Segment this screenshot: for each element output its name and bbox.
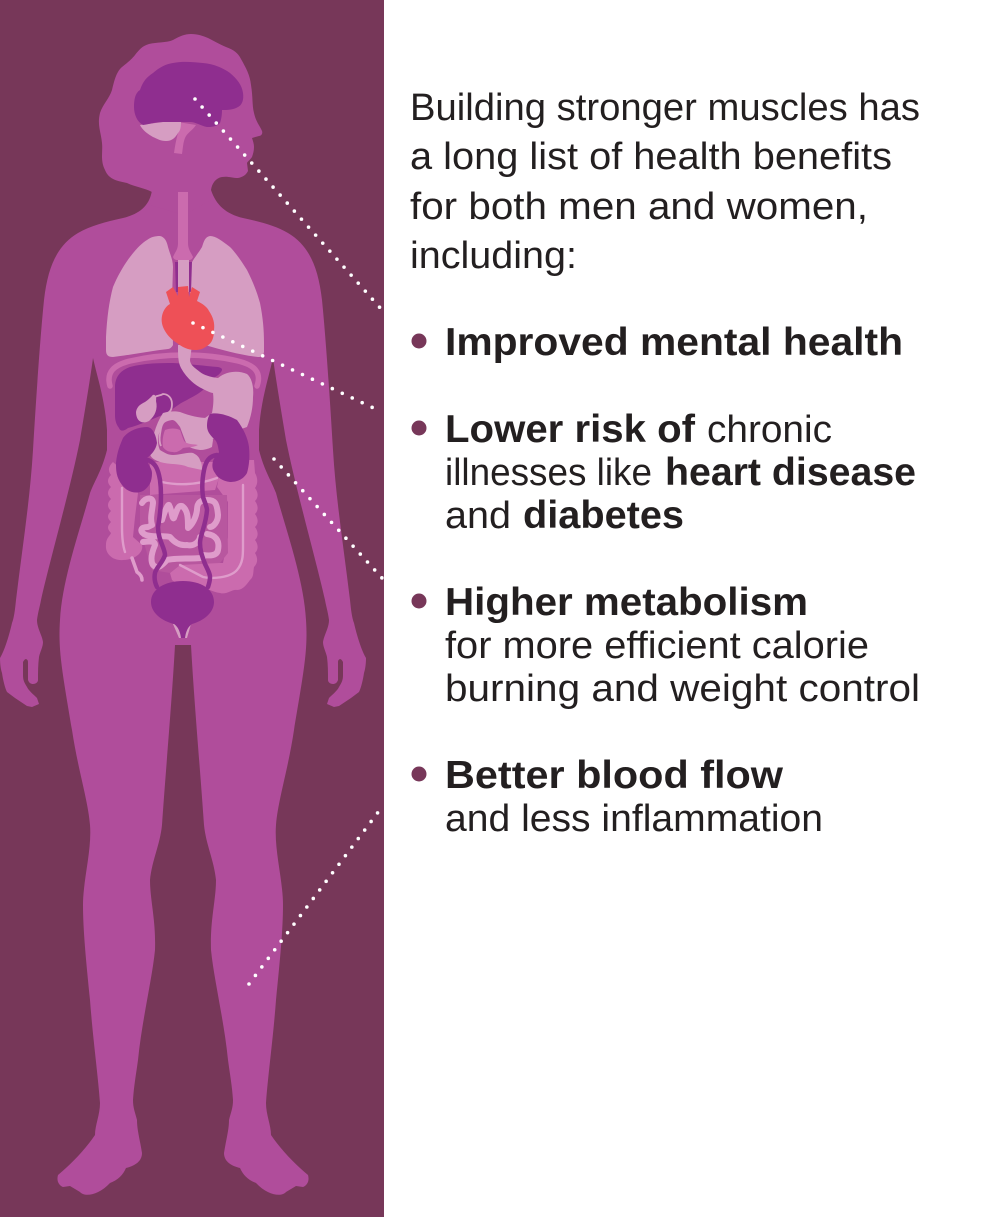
benefit: higher metabolism: for more efficient calorie [445, 625, 869, 667]
benefit: lower risk of chronic illnesses: heart disease [665, 451, 916, 494]
benefit: lower risk of chronic illnesses: Lower risk of [445, 408, 696, 451]
organ: bladder [151, 581, 214, 638]
organ: small intestine background [140, 495, 228, 573]
organ: lungs [106, 236, 264, 357]
dotted leader: blood flow [249, 807, 382, 984]
organ: kidneys [116, 413, 249, 493]
organ: gallbladder [136, 394, 172, 446]
bullet [412, 594, 426, 608]
benefit: higher metabolism: Higher metabolism [445, 581, 808, 624]
benefit: higher metabolism: burning and weight control [445, 668, 920, 710]
organ: liver [115, 363, 222, 431]
organ: ureters [148, 455, 217, 587]
benefit: lower risk of chronic illnesses: diabetes [523, 494, 684, 537]
intro text: including: [410, 235, 577, 277]
benefit: better blood flow: Better blood flow [445, 754, 784, 797]
benefit: lower risk of chronic illnesses: illnesses like [445, 452, 652, 494]
bullet [412, 766, 426, 782]
cerebrum [134, 62, 243, 127]
left lung [106, 236, 173, 357]
dotted leader: heart [193, 323, 382, 412]
benefit: better blood flow: and less inflammation [445, 798, 823, 840]
organ: pancreas [163, 428, 198, 452]
organ: stomach and oesophagus [178, 345, 253, 440]
organ: large intestine [106, 460, 258, 593]
intro text: a long list of health benefits [410, 136, 892, 178]
organ: duodenum band [150, 411, 213, 470]
benefit: higher metabolism [412, 581, 920, 710]
intro text: Building stronger muscles has [410, 87, 920, 129]
benefit: lower risk of chronic illnesses [412, 408, 916, 537]
organ: brain [134, 62, 243, 154]
benefit: lower risk of chronic illnesses: chronic [707, 409, 832, 451]
organ: trachea [173, 192, 193, 292]
right lung [190, 236, 264, 357]
figure: human body with organs [0, 34, 382, 1195]
dotted leader: brain [195, 99, 382, 310]
intro text [410, 87, 920, 277]
dotted leader: metabolism [274, 459, 382, 578]
organ: heart [162, 286, 214, 350]
bullet [412, 420, 426, 436]
body silhouette [0, 34, 366, 1195]
bullet [412, 334, 426, 348]
organ: diaphragm [109, 355, 258, 386]
benefit: improved mental health: Improved mental health [445, 321, 903, 364]
brain stem [174, 122, 196, 154]
organ: colon lines and appendix [122, 478, 243, 580]
intro text: for both men and women, [410, 186, 868, 228]
benefit: lower risk of chronic illnesses: and [445, 495, 511, 537]
organ: small intestine coils [141, 498, 218, 567]
panel: body figure background [0, 0, 384, 1217]
cerebellum [140, 122, 181, 141]
benefit: better blood flow [412, 754, 823, 840]
